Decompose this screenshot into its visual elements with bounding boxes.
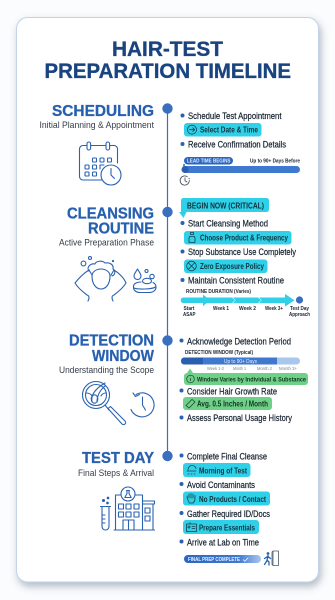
panel: detection window heading: Understanding the Scope	[59, 365, 154, 376]
icon: calendar with clock	[80, 142, 121, 185]
panel: cleansing steps: Start Cleansing Method	[188, 218, 268, 228]
chart: routine duration arrow: Approach	[289, 312, 310, 318]
panel: scheduling heading: Initial Planning & Appointment	[40, 120, 154, 131]
title	[44, 38, 291, 83]
panel: scheduling steps: Schedule Test Appointment	[188, 111, 282, 121]
panel: cleansing heading: ROUTINE	[88, 220, 154, 238]
panel: cleansing heading: CLEANSING	[67, 206, 154, 222]
chart: routine duration arrow	[181, 289, 310, 318]
callout: zero exposure: Zero Exposure Policy	[200, 262, 264, 271]
panel: scheduling steps	[180, 111, 286, 150]
title: HAIR-TEST	[112, 38, 223, 61]
panel: cleansing steps: Stop Substance Use Completely	[188, 247, 296, 257]
panel: cleansing heading	[59, 206, 154, 248]
panel: detection window heading: WINDOW	[92, 348, 155, 365]
panel: scheduling heading	[40, 103, 154, 131]
callout: begin now: BEGIN NOW (CRITICAL)	[187, 202, 264, 210]
callout: choose product: Choose Product & Frequency	[200, 234, 288, 243]
callout: window varies	[184, 368, 308, 385]
panel: detection steps: Acknowledge Detection Period	[187, 336, 291, 346]
panel: test day steps	[180, 452, 270, 548]
timeline spine	[162, 103, 173, 461]
chart: detection window bar: Month 1	[233, 366, 246, 371]
icon: washing hair and soap	[75, 256, 156, 301]
panel: detection window heading: DETECTION	[69, 332, 154, 350]
chart: routine duration arrow: ASAP	[183, 312, 196, 318]
chart: detection window bar: Month 2	[257, 366, 272, 371]
panel: cleansing steps: Maintain Consistent Routine	[188, 276, 284, 286]
chart: routine duration arrow: Week 2	[239, 306, 256, 312]
panel: test day heading: Final Steps & Arrival	[78, 468, 154, 479]
callout: average growth: Avg. 0.5 Inches / Month	[197, 400, 268, 409]
panel: cleansing heading: Active Preparation Phase	[59, 238, 154, 248]
chart: routine duration arrow: Start	[184, 306, 195, 312]
chart: detection window bar: Month 3+	[279, 366, 297, 371]
panel: test day steps: Gather Required ID/Docs	[187, 509, 270, 519]
callout: no products: No Products / Contact	[199, 495, 266, 504]
icon: lab building and test tube	[100, 487, 154, 530]
chart: routine duration arrow: Test Day	[290, 306, 309, 312]
panel: test day steps: Arrive at Lab on Time	[187, 538, 259, 548]
panel: hair growth steps	[180, 386, 292, 423]
panel: detection window heading	[59, 332, 155, 376]
chart: detection window bar: DETECTION WINDOW (Typical)	[185, 350, 253, 356]
panel: hair growth steps: Assess Personal Usage History	[187, 413, 292, 423]
status bar: final prep complete	[184, 555, 261, 563]
callout: window varies: Window Varies by Individual & Substance	[197, 376, 306, 384]
chart: detection window bar: Week 1-2	[207, 366, 224, 371]
chart: routine duration arrow: Week 3+	[265, 306, 283, 312]
panel: scheduling heading: SCHEDULING	[52, 103, 154, 120]
icon: magnifier over hair follicle and clock	[82, 382, 154, 425]
chart: routine duration arrow: ROUTINE DURATION (Varies)	[186, 289, 251, 295]
chart: lead time bar: Up to 90+ Days Before	[250, 159, 300, 165]
panel: hair growth steps: Consider Hair Growth Rate	[187, 386, 277, 396]
chart: lead time bar	[180, 157, 300, 185]
callout: morning of test: Morning of Test	[199, 466, 247, 476]
chart: detection window bar	[181, 350, 300, 371]
panel: test day heading	[78, 450, 154, 479]
panel: cleansing steps	[180, 218, 296, 286]
callout: select date and time: Select Date & Time	[200, 126, 258, 135]
title: PREPARATION TIMELINE	[44, 60, 291, 83]
panel: test day heading: TEST DAY	[82, 450, 154, 467]
status bar: final prep complete: FINAL PREP COMPLETE	[188, 557, 241, 563]
panel: test day steps: Complete Final Cleanse	[187, 452, 267, 462]
icon: small clock	[180, 176, 189, 185]
callout: prepare essentials: Prepare Essentials	[199, 523, 255, 532]
icon: person entering door	[264, 551, 278, 566]
panel: scheduling steps: Receive Confirmation Details	[188, 140, 286, 150]
panel: test day steps: Avoid Contaminants	[187, 480, 255, 490]
chart: routine duration arrow: Week 1	[213, 306, 229, 312]
chart: detection window bar: Up to 90+ Days	[224, 359, 257, 365]
chart: lead time bar: LEAD TIME BEGINS	[187, 159, 231, 165]
callout: begin now	[179, 198, 269, 218]
